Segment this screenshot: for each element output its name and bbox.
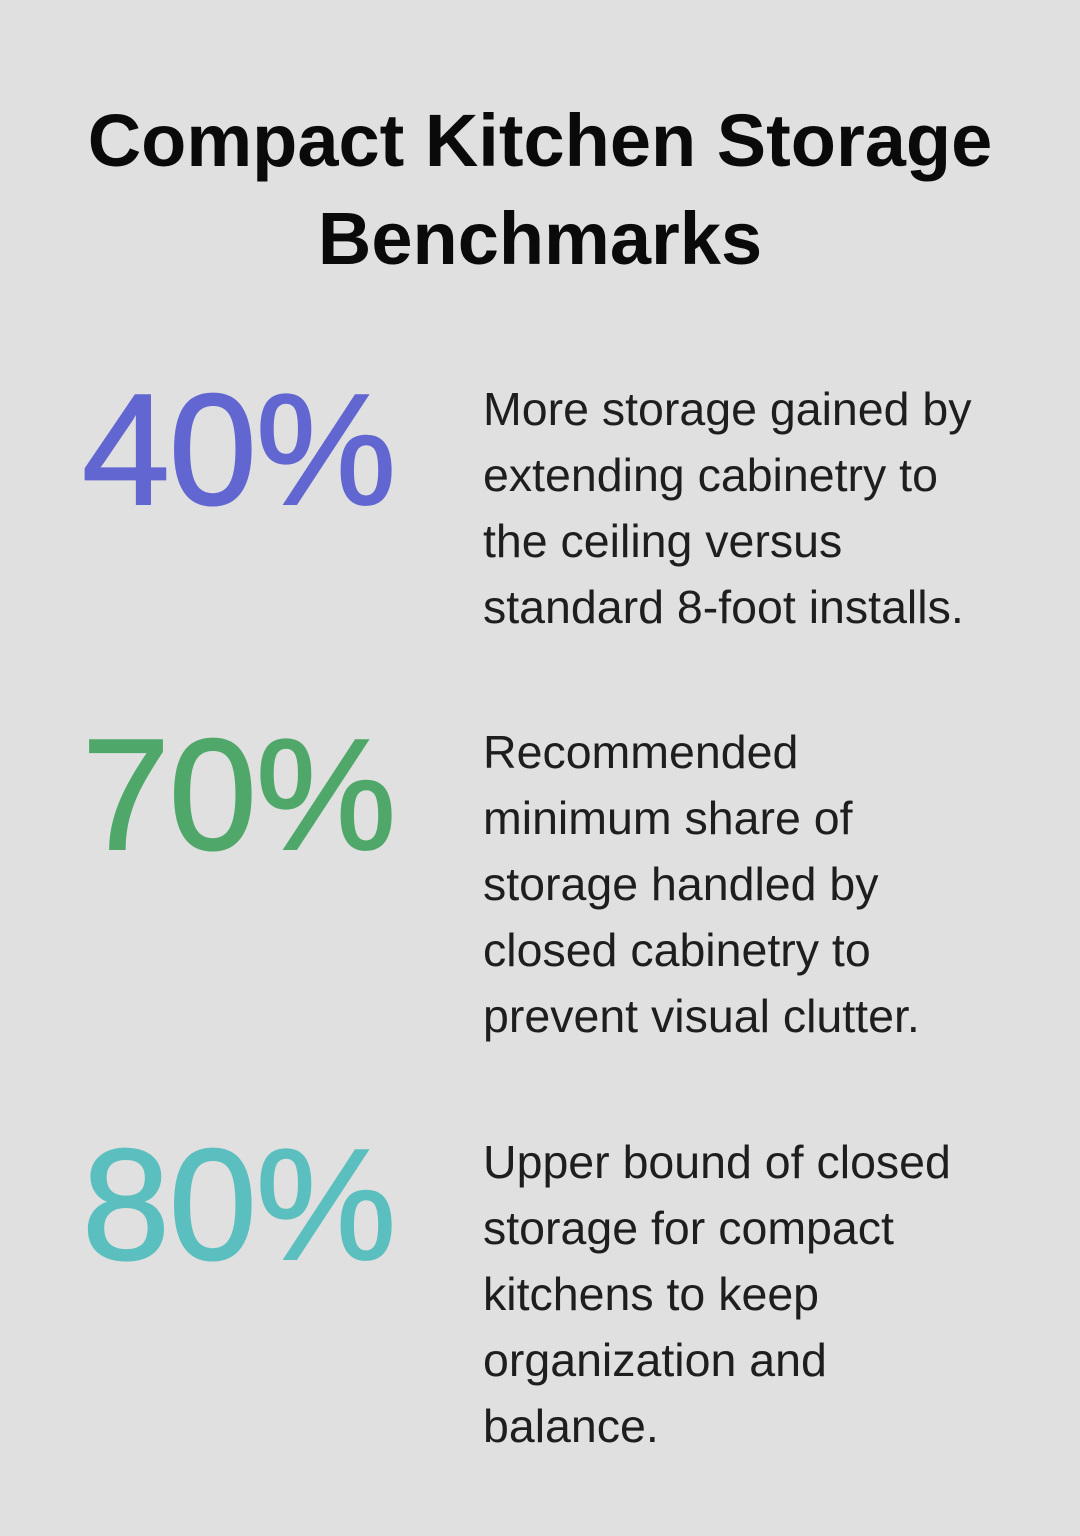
text: stat 2 description: prevent visual clutter. [483, 990, 920, 1042]
text: stat 1 description: More storage gained by [483, 383, 972, 435]
stat 2: 70%: 70% [82, 707, 395, 883]
title: Benchmarks [318, 197, 762, 280]
text: stat 1 description [483, 383, 972, 633]
text: stat 3 description: organization and [483, 1334, 827, 1386]
text: stat 1 description: the ceiling versus [483, 515, 842, 567]
stat 3: 80%: 80% [82, 1117, 395, 1293]
text: stat 3 description [483, 1136, 951, 1452]
title: Compact Kitchen Storage [88, 99, 992, 182]
text: stat 3 description: storage for compact [483, 1202, 894, 1254]
text: stat 3 description: Upper bound of closed [483, 1136, 951, 1188]
text: stat 2 description: minimum share of [483, 792, 853, 844]
stat 1: 40%: 40% [82, 362, 395, 538]
title [88, 99, 992, 280]
text: stat 1 description: standard 8-foot installs. [483, 581, 964, 633]
text: stat 1 description: extending cabinetry to [483, 449, 938, 501]
text: stat 3 description: balance. [483, 1400, 659, 1452]
text: stat 2 description: closed cabinetry to [483, 924, 871, 976]
text: stat 3 description: kitchens to keep [483, 1268, 819, 1320]
text: stat 2 description [483, 726, 920, 1042]
text: stat 2 description: Recommended [483, 726, 798, 778]
text: stat 2 description: storage handled by [483, 858, 879, 910]
